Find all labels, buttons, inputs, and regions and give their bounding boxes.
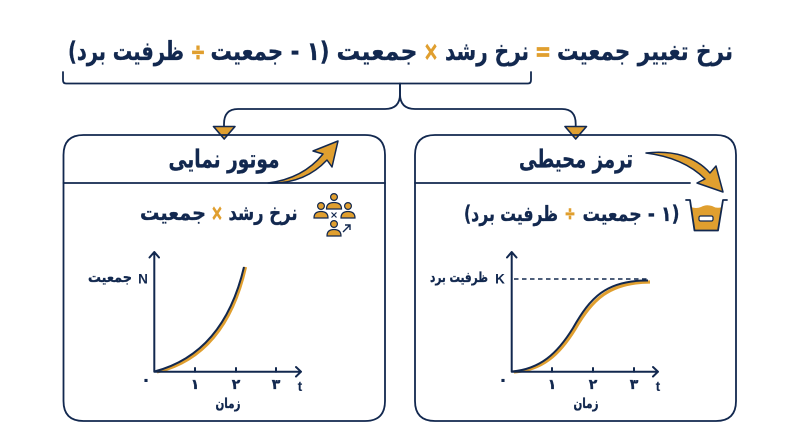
chart: logistic growth: ۳ [630, 377, 639, 393]
title: logistic formula [68, 37, 733, 67]
heading: brake: ترمز محیطی [519, 144, 633, 174]
arrow: bracket to motor panel [214, 84, 400, 139]
chart: exponential growth: ۰ [140, 370, 152, 390]
subheading: one minus population over capacity [464, 202, 680, 226]
chart: exponential growth: جمعیت [88, 270, 132, 286]
chart: logistic growth [430, 252, 661, 412]
subheading: growth rate times population [140, 201, 298, 225]
icon: people with growth [314, 194, 355, 236]
subheading: one minus population over capacity: (۱ - جمعیت [582, 202, 680, 226]
subheading: growth rate times population: نرخ رشد [228, 201, 298, 225]
panel: exponential motor [64, 135, 385, 421]
title: logistic formula: ÷ [190, 38, 206, 66]
title: logistic formula: (۱ - جمعیت [210, 37, 330, 67]
subheading: growth rate times population: جمعیت [140, 201, 206, 225]
title: logistic formula: جمعیت [336, 37, 418, 67]
panel: environmental brake [415, 135, 736, 421]
subheading: one minus population over capacity: ÷ [564, 203, 576, 225]
chart: exponential growth: ۱ [191, 377, 199, 393]
bracket under formula [63, 72, 531, 84]
icon: bucket with minus [686, 200, 727, 230]
chart: logistic growth: K [495, 272, 505, 286]
chart: exponential growth: t [298, 378, 303, 394]
title: logistic formula: ظرفیت برد) [68, 37, 184, 67]
title: logistic formula: نرخ رشد [445, 37, 529, 67]
arrow: downward curved [646, 152, 723, 192]
title: logistic formula: نرخ تغییر جمعیت [557, 37, 733, 67]
subheading: growth rate times population: × [211, 201, 223, 225]
chart: exponential growth: N [138, 272, 148, 286]
heading: motor: موتور نمایی [168, 144, 280, 174]
chart: exponential growth: ۳ [272, 377, 281, 393]
arrow: bracket to brake panel [400, 84, 586, 139]
chart: exponential growth: ۲ [232, 377, 241, 393]
chart: logistic growth: t [656, 378, 661, 394]
title: logistic formula: = [535, 37, 551, 67]
chart: logistic growth: ۰ [498, 370, 508, 390]
chart: exponential growth: زمان [216, 396, 240, 412]
chart: logistic growth: ۱ [548, 377, 556, 393]
arrow: upward curved [268, 141, 338, 183]
title: logistic formula: × [424, 37, 438, 67]
chart: exponential growth [88, 252, 303, 412]
subheading: one minus population over capacity: ظرفیت برد) [464, 202, 558, 226]
chart: logistic growth: زمان [574, 396, 598, 412]
chart: logistic growth: ۲ [589, 377, 598, 393]
chart: logistic growth: ظرفیت برد [430, 270, 488, 286]
